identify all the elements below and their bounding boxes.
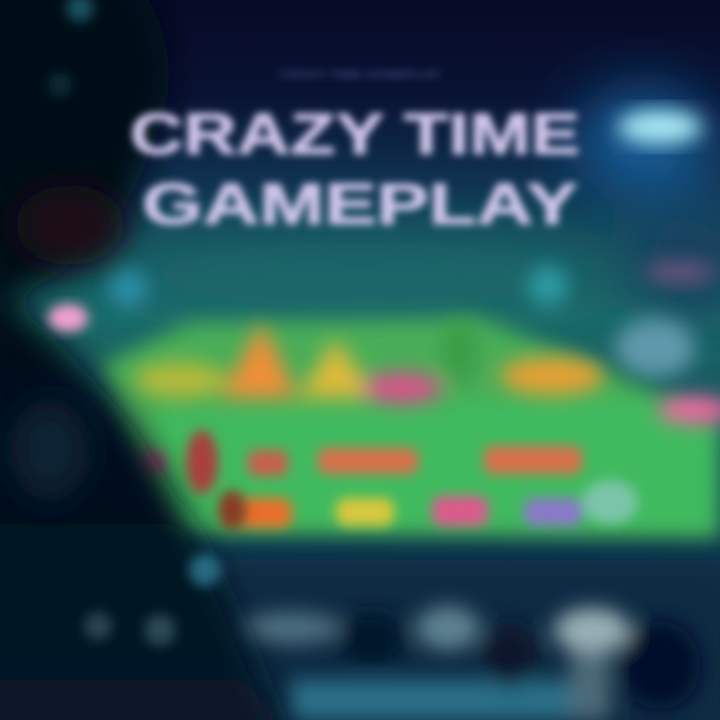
- crowd and desk: [238, 606, 700, 720]
- viewer details: [10, 185, 125, 500]
- front crowd band: [150, 560, 720, 720]
- spotlight badge: [618, 110, 702, 144]
- game field: [100, 318, 720, 540]
- title: [130, 102, 580, 237]
- title: CRAZY TIME: [130, 102, 580, 167]
- viewer hand: [186, 430, 246, 530]
- game tiles row two: [238, 480, 638, 528]
- stadium side lights: [108, 262, 716, 378]
- silhouette highlights: [48, 0, 221, 646]
- colourful game segments: [134, 320, 720, 424]
- game tiles row one: [136, 446, 582, 476]
- stadium glow: [100, 90, 720, 320]
- viewer silhouette: [0, 0, 290, 720]
- pink side light: [48, 304, 88, 332]
- title: GAMEPLAY: [142, 172, 578, 237]
- small heading: CRAZY TIME GAMEPLAY: [280, 69, 441, 81]
